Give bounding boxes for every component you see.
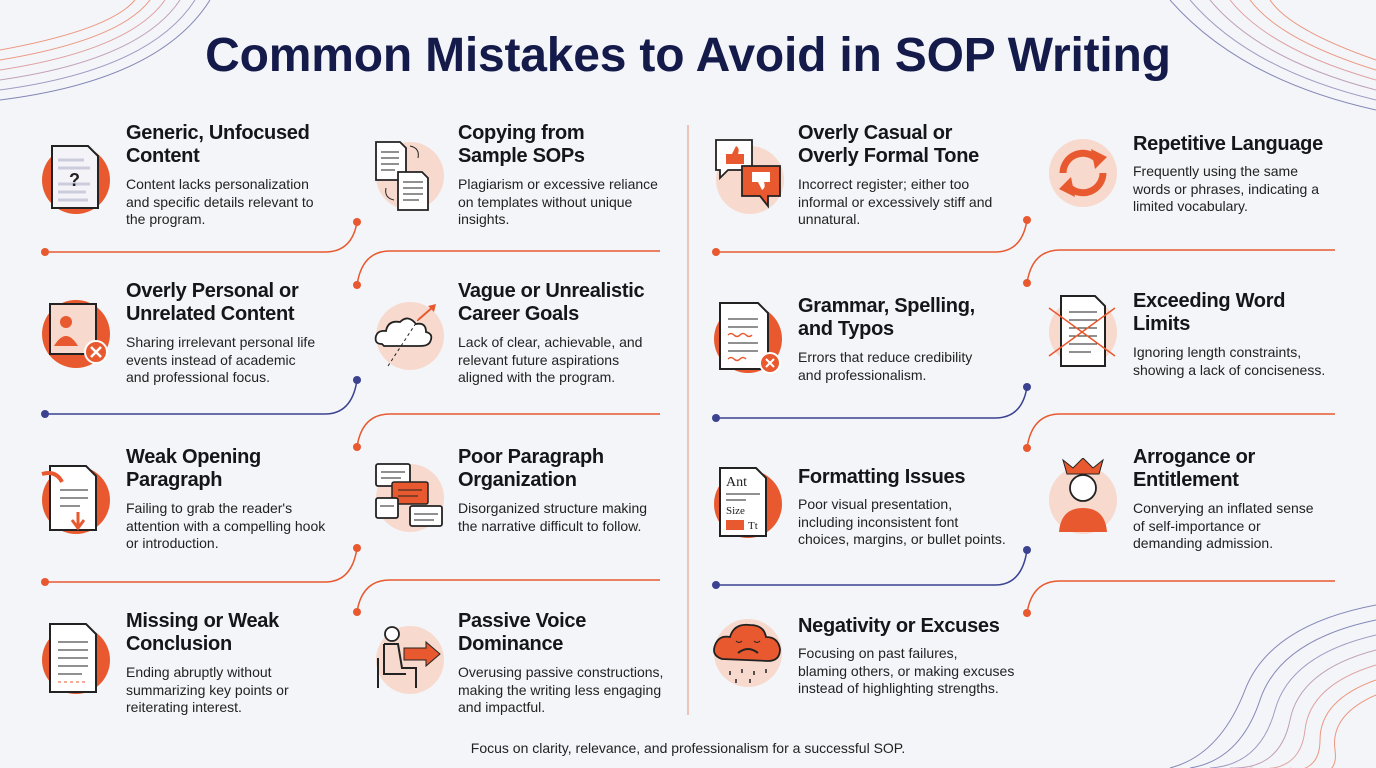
item: Weak Opening Paragraph: or introduction. [126,535,219,551]
icon: document with errors [714,302,782,374]
item: Arrogance or Entitlement [1049,446,1314,551]
item: Repetitive Language [1049,133,1323,214]
item: Vague or Unrealistic Career Goals: aligned with the program. [458,369,615,385]
icon: crowned person [1049,458,1117,534]
item: Poor Paragraph Organization: the narrative difficult to follow. [458,518,641,534]
item: Passive Voice Dominance: Overusing passive constructions, [458,664,663,680]
item: Poor Paragraph Organization: Organization [458,469,577,491]
item: Grammar, Spelling, and Typos: and professionalism. [798,366,926,382]
item: Copying from Sample SOPs: Sample SOPs [458,145,585,167]
icon: document question: ? [69,170,80,190]
item: Exceeding Word Limits: Ignoring length constraints, [1133,344,1301,360]
icon: cloud with arrow [374,302,444,370]
item: Repetitive Language: words or phrases, indicating a [1133,180,1319,196]
item: Overly Personal or Unrelated Content: and professional focus. [126,369,270,385]
connectors [45,125,1335,715]
item: Overly Casual or Overly Formal Tone: Overly Formal Tone [798,145,979,167]
icon: document with arrow [42,465,110,534]
item: Vague or Unrealistic Career Goals [374,280,644,385]
item: Missing or Weak Conclusion: Missing or Weak [126,610,279,632]
icon: thumbs bubbles [715,139,784,214]
icon: copied documents [375,141,444,211]
item: Formatting Issues [714,466,1006,547]
item: Grammar, Spelling, and Typos: Errors that reduce credibility [798,349,972,365]
item: Copying from Sample SOPs: Plagiarism or excessive reliance [458,176,658,192]
icon: formatting document: Size [726,505,745,517]
item: Copying from Sample SOPs: on templates without unique [458,194,632,210]
item: Repetitive Language: Frequently using the same [1133,163,1298,179]
item: Copying from Sample SOPs: Copying from [458,122,584,144]
item: Weak Opening Paragraph: attention with a compelling hook [126,518,325,534]
item: Generic, Unfocused Content [42,122,314,227]
item: Vague or Unrealistic Career Goals: Vague or Unrealistic [458,280,644,302]
item: Generic, Unfocused Content: Content lacks personalization [126,176,309,192]
item: Negativity or Excuses: instead of highlighting strengths. [798,680,999,696]
item: Overly Personal or Unrelated Content: events instead of academic [126,352,296,368]
item: Overly Casual or Overly Formal Tone: unnatural. [798,211,860,227]
item: Weak Opening Paragraph: Weak Opening [126,446,261,468]
item: Copying from Sample SOPs: insights. [458,211,509,227]
item: Arrogance or Entitlement: demanding admission. [1133,535,1273,551]
item: Exceeding Word Limits: showing a lack of conciseness. [1133,362,1325,378]
item: Overly Personal or Unrelated Content: Sharing irrelevant personal life [126,334,315,350]
item: Repetitive Language: Repetitive Language [1133,133,1323,155]
item: Overly Casual or Overly Formal Tone: Incorrect register; either too [798,176,969,192]
item: Negativity or Excuses: Focusing on past failures, [798,645,958,661]
item: Poor Paragraph Organization [375,446,647,534]
item: Overly Personal or Unrelated Content: Unrelated Content [126,303,294,325]
item: Overly Casual or Overly Formal Tone: informal or excessively stiff and [798,194,992,210]
item: Passive Voice Dominance: Dominance [458,633,563,655]
item: Formatting Issues: choices, margins, or bullet points. [798,531,1006,547]
item: Arrogance or Entitlement: of self-importance or [1133,518,1261,534]
item: Formatting Issues: Formatting Issues [798,466,965,488]
icon: document over limit [1048,295,1117,367]
item: Grammar, Spelling, and Typos [714,295,975,383]
item: Generic, Unfocused Content: Generic, Unfocused [126,122,310,144]
item: Passive Voice Dominance: and impactful. [458,699,545,715]
item: Negativity or Excuses: Negativity or Excuses [798,615,1000,637]
item: Missing or Weak Conclusion: Conclusion [126,633,232,655]
icon: cycle arrows [1049,139,1117,207]
item: Poor Paragraph Organization: Poor Paragraph [458,446,604,468]
item: Missing or Weak Conclusion: reiterating interest. [126,699,242,715]
item: Weak Opening Paragraph: Failing to grab the reader's [126,500,292,516]
item: Repetitive Language: limited vocabulary. [1133,198,1248,214]
icon: formatting document [714,467,782,538]
item: Vague or Unrealistic Career Goals: Lack of clear, achievable, and [458,334,642,350]
icon: scattered blocks [375,463,444,532]
item: Grammar, Spelling, and Typos: and Typos [798,318,894,340]
item: Arrogance or Entitlement: Converying an inflated sense [1133,500,1314,516]
item: Overly Personal or Unrelated Content: Overly Personal or [126,280,298,302]
item: Passive Voice Dominance: Passive Voice [458,610,586,632]
item: Exceeding Word Limits: Limits [1133,313,1190,335]
item: Arrogance or Entitlement: Arrogance or [1133,446,1255,468]
item: Negativity or Excuses: blaming others, or making excuses [798,662,1014,678]
icon: seated person with arrow [376,626,444,694]
icon: document question [42,145,110,214]
item: Passive Voice Dominance [376,610,663,715]
item: Vague or Unrealistic Career Goals: relevant future aspirations [458,352,619,368]
item: Exceeding Word Limits: Exceeding Word [1133,290,1285,312]
item: Negativity or Excuses [713,615,1014,696]
item: Overly Personal or Unrelated Content [42,280,315,385]
icon: sad rain cloud [713,619,782,687]
item: Exceeding Word Limits [1048,290,1325,378]
item: Vague or Unrealistic Career Goals: Career Goals [458,303,579,325]
item: Copying from Sample SOPs [375,122,658,227]
item: Generic, Unfocused Content: Content [126,145,199,167]
item: Formatting Issues: including inconsistent font [798,514,958,530]
title: Common Mistakes to Avoid in SOP Writing [205,29,1171,82]
item: Overly Casual or Overly Formal Tone: Overly Casual or [798,122,952,144]
icon: formatting document: Ant [726,475,747,490]
item: Arrogance or Entitlement: Entitlement [1133,469,1239,491]
item: Missing or Weak Conclusion [42,610,289,715]
item: Passive Voice Dominance: making the writing less engaging [458,682,661,698]
icon: formatting document: Tt [748,520,758,532]
item: Grammar, Spelling, and Typos: Grammar, Spelling, [798,295,975,317]
icon: photo with x [42,300,110,368]
item: Missing or Weak Conclusion: summarizing key points or [126,682,289,698]
item: Overly Casual or Overly Formal Tone [715,122,992,227]
item: Weak Opening Paragraph [42,446,326,551]
item: Weak Opening Paragraph: Paragraph [126,469,222,491]
item: Poor Paragraph Organization: Disorganized structure making [458,500,647,516]
item: Generic, Unfocused Content: the program. [126,211,205,227]
item: Missing or Weak Conclusion: Ending abruptly without [126,664,272,680]
item: Generic, Unfocused Content: and specific details relevant to [126,194,314,210]
footer note: Focus on clarity, relevance, and professionalism for a successful SOP. [471,740,905,756]
item: Formatting Issues: Poor visual presentation, [798,496,952,512]
icon: document missing end [42,623,110,694]
